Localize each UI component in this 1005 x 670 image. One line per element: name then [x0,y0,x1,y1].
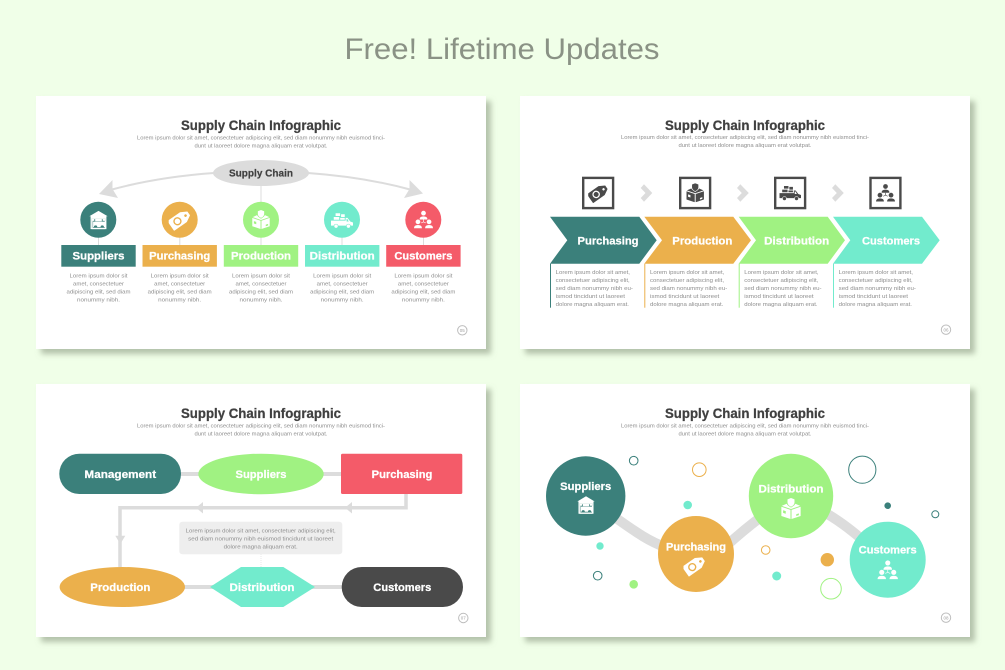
page number [941,325,951,334]
step: distribution: sed diam nonummy nibh eu- [744,286,822,292]
step: customers: Lorem ipsum dolor sit amet, [839,270,913,276]
step: customers: ismod tincidunt ut laoreet [839,294,908,300]
intro text: dunt ut laoreet dolore magna aliquam erat volutpat. [194,144,328,150]
column: purchasing: nonummy nibh. [158,297,202,303]
bubble: suppliers: Suppliers [560,481,611,493]
column: distribution: nonummy nibh. [321,297,364,303]
panel: flowchart [36,384,486,637]
panel background [520,96,970,349]
node: production: Production [90,582,151,594]
step: purchasing: ismod tincidunt ut laoreet [556,294,625,300]
intro text [621,424,869,438]
step: distribution: consectetuer adipiscing elit, [744,278,819,284]
connector: top row [180,472,342,476]
step: purchasing: consectetuer adipiscing elit, [556,278,630,284]
column: distribution: Lorem ipsum dolor sit [313,273,372,279]
panel: supply chain arc [36,96,486,349]
arrow: right arc [308,173,423,198]
note box: sed diam nonummy nibh euismod tincidunt ut laoreet [188,537,334,543]
node: distribution: Distribution [230,582,295,594]
icon: people box [870,178,900,208]
column: production: amet, consectetuer [236,281,287,287]
step: customers [833,217,940,308]
column: suppliers: amet, consectetuer [73,281,124,287]
note box: dolore magna aliquam erat. [224,545,298,551]
intro text: Lorem ipsum dolor sit amet, consectetuer adipiscing elit, sed diam nonummy nibh euismod tinci- [137,136,385,142]
step: production: dolore magna aliquam erat. [650,302,724,308]
icon: truck box [775,178,805,208]
column: suppliers: Lorem ipsum dolor sit [70,273,128,279]
hub: supply chain ellipse [213,160,309,186]
node: customers [342,567,463,607]
column: suppliers: nonummy nibh. [77,297,120,303]
column: distribution: amet, consectetuer [317,281,368,287]
arrow: grey chevron 1 [641,184,652,202]
column: production: adipiscing elit, sed diam [229,289,293,295]
connector: winding path [610,511,865,547]
intro text: dunt ut laoreet dolore magna aliquam erat volutpat. [678,143,812,149]
page number: 06 [943,327,949,332]
step: distribution: Distribution [764,235,829,247]
arrow: purchasing to production [115,494,406,567]
node: purchasing: Purchasing [372,469,432,481]
column: distribution: adipiscing elit, sed diam [310,289,374,295]
column: production: Production [231,251,291,263]
heading: Supply Chain Infographic [665,118,825,133]
step: purchasing: sed diam nonummy nibh eu- [556,286,633,292]
icon: tag box [583,178,613,208]
bubble: suppliers [546,456,625,536]
node: customers: Customers [373,582,431,594]
arrow: grey chevron 3 [832,184,844,202]
bubble: purchasing: Purchasing [666,542,726,554]
column: production: nonummy nibh. [240,297,283,303]
arrow: left arc [99,173,214,198]
step: production: Lorem ipsum dolor sit amet, [650,270,725,276]
intro text: Lorem ipsum dolor sit amet, consectetuer adipiscing elit, sed diam nonummy nibh euismod tinci- [621,424,869,430]
note box: Lorem ipsum dolor sit amet, consectetuer adipiscing elit, [186,529,336,535]
panel background [36,96,486,349]
step: production [644,217,751,308]
step: purchasing: Purchasing [578,235,638,247]
node: management: Management [84,469,156,481]
connector: bottom row [184,585,342,589]
node: suppliers [198,454,324,494]
step: distribution [739,217,845,308]
column: suppliers: Suppliers [72,251,124,263]
column: customers: Lorem ipsum dolor sit [394,273,453,279]
node: distribution [210,567,315,607]
page number: 05 [460,328,465,333]
column: distribution: Distribution [310,251,375,263]
intro text [137,136,385,150]
page number [458,326,467,335]
step: distribution: dolore magna aliquam erat. [744,302,818,308]
step: purchasing: dolore magna aliquam erat. [556,302,629,308]
column: purchasing: amet, consectetuer [154,281,205,287]
decorative dots [593,456,939,599]
column: customers: nonummy nibh. [402,297,445,303]
node: production [60,567,185,607]
heading: Supply Chain Infographic [665,406,825,421]
step: customers: dolore magna aliquam erat. [839,302,912,308]
column: purchasing: Lorem ipsum dolor sit [151,273,209,279]
heading: Supply Chain Infographic [181,406,341,421]
heading: Supply Chain Infographic [181,118,341,133]
intro text: dunt ut laoreet dolore magna aliquam erat volutpat. [194,432,328,438]
step: production: sed diam nonummy nibh eu- [650,286,727,292]
hub: supply chain ellipse: Supply Chain [229,168,293,180]
step: production: Production [672,235,733,247]
bubble: customers: Customers [859,544,917,556]
page number: 08 [943,615,949,620]
page number [459,613,468,623]
step: customers: consectetuer adipiscing elit, [839,278,913,284]
column: suppliers: adipiscing elit, sed diam [66,289,131,295]
column: customers: adipiscing elit, sed diam [391,289,456,295]
intro text [621,135,869,149]
icon: package box [680,178,710,208]
connector: dotted note link [260,554,262,567]
step: distribution: ismod tincidunt ut laoreet [744,294,814,300]
step: purchasing [550,217,657,308]
bubble: distribution: Distribution [758,483,824,495]
page number [941,613,951,622]
column: purchasing: adipiscing elit, sed diam [148,289,212,295]
column: production: Lorem ipsum dolor sit [232,273,290,279]
step: production: consectetuer adipiscing elit, [650,278,724,284]
node: management [59,454,181,494]
step: distribution: Lorem ipsum dolor sit amet, [744,270,819,276]
node: suppliers: Suppliers [236,469,286,481]
column: purchasing: Purchasing [149,251,210,263]
bubble: distribution [749,454,833,538]
column: customers [386,202,461,303]
node: purchasing [341,454,462,494]
column: production [224,202,298,303]
connector: hub to production [260,186,262,202]
intro text: Lorem ipsum dolor sit amet, consectetuer adipiscing elit, sed diam nonummy nibh euismod tinci- [621,135,869,141]
title: Free! Lifetime Updates [344,33,660,66]
panel background [36,384,486,637]
panel: chevron process [520,96,970,349]
column: distribution [305,202,379,303]
note box [179,522,342,554]
panel background [520,384,970,637]
column: purchasing [142,202,217,303]
panel: bubble path [520,384,970,637]
intro text: dunt ut laoreet dolore magna aliquam erat volutpat. [678,432,812,438]
bubble: customers [850,522,926,598]
step: customers: sed diam nonummy nibh eu- [839,286,916,292]
step: customers: Customers [862,235,920,247]
column: suppliers [61,202,136,303]
step: purchasing: Lorem ipsum dolor sit amet, [556,270,630,276]
column: customers: amet, consectetuer [398,281,449,287]
intro text: Lorem ipsum dolor sit amet, consectetuer adipiscing elit, sed diam nonummy nibh euismod tinci- [137,424,385,430]
bubble: purchasing [658,516,734,592]
step: production: ismod tincidunt ut laoreet [650,294,720,300]
arrow: grey chevron 2 [737,184,749,202]
column: customers: Customers [394,251,452,263]
page number: 07 [461,616,466,621]
intro text [137,424,385,438]
